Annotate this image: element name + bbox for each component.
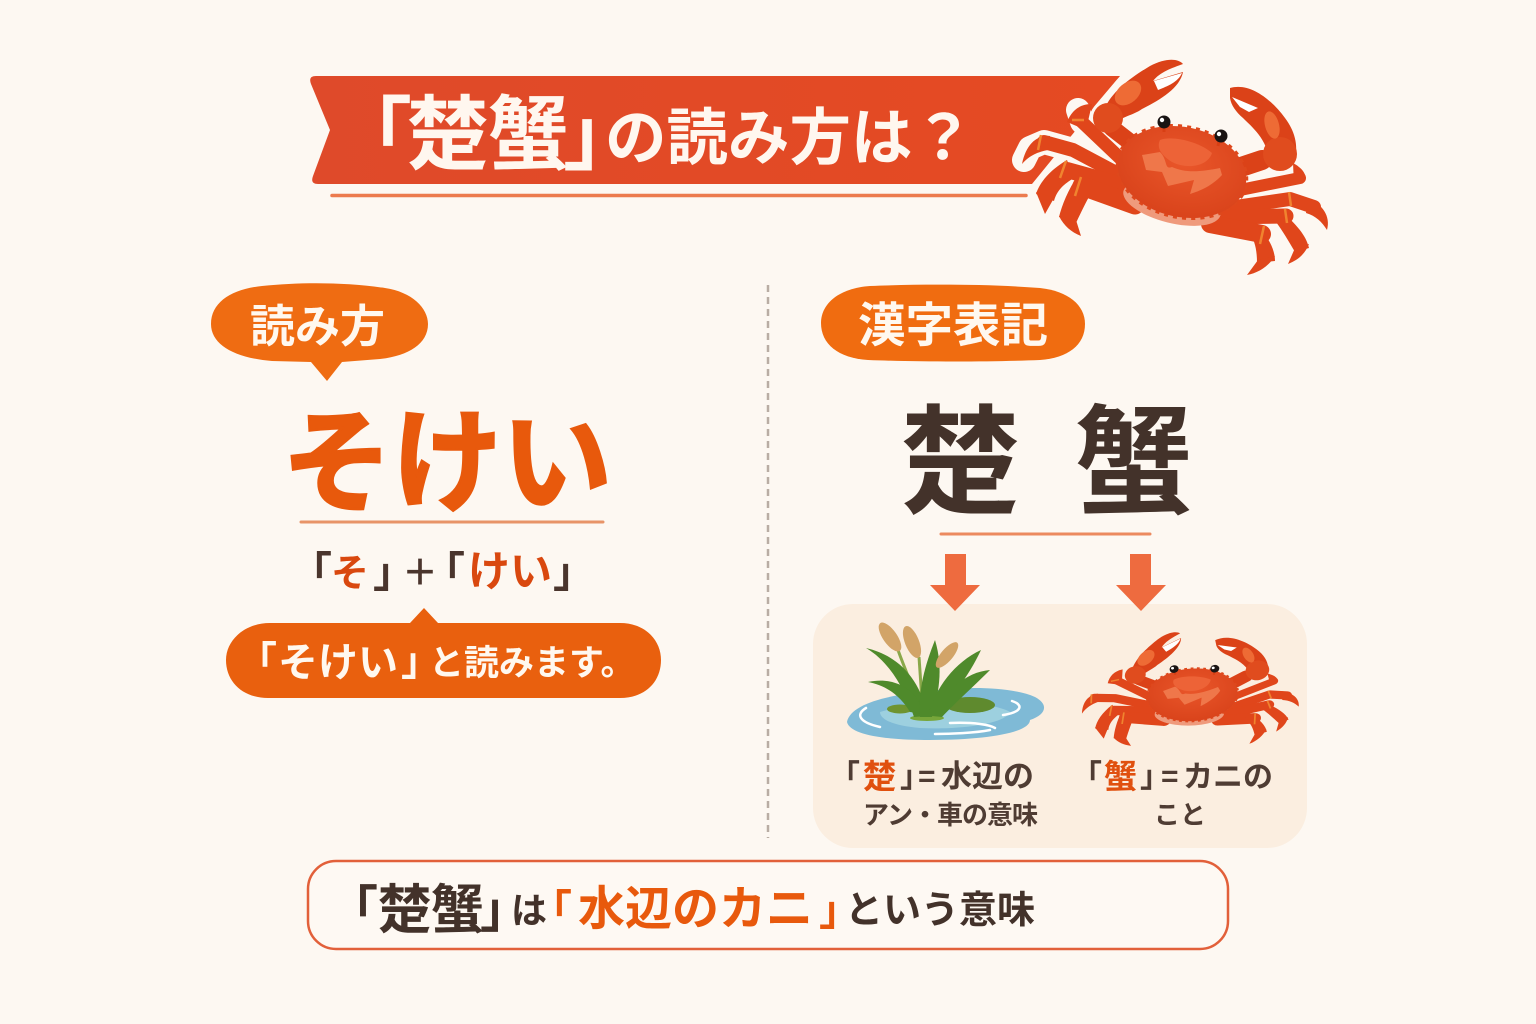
caption: crab: カニの <box>1183 761 1273 794</box>
summary text: 楚蟹 <box>378 881 484 940</box>
summary text: 」 <box>819 887 861 934</box>
breakdown formula: そ <box>331 553 369 595</box>
large kanji: 蟹 <box>1075 398 1193 530</box>
speech bubble: reading label <box>211 283 428 381</box>
arrow: left <box>930 554 980 611</box>
title text: 「 <box>332 91 412 180</box>
icon: small crab <box>1069 610 1305 777</box>
summary text: 「 <box>328 882 378 938</box>
title text: 」 <box>563 91 643 180</box>
callout pill <box>226 608 661 698</box>
icon: reeds in pond <box>847 619 1044 740</box>
breakdown formula: 」 <box>553 549 595 596</box>
breakdown formula: 」 <box>373 549 415 596</box>
breakdown formula: けい <box>468 548 552 595</box>
callout pill: そけい <box>278 641 398 685</box>
callout pill: 」 <box>401 640 441 684</box>
caption: reeds: 」 <box>900 759 931 794</box>
icon: large crab <box>1022 60 1328 275</box>
summary box <box>308 861 1228 949</box>
breakdown formula: ＋ <box>402 552 438 593</box>
caption: reeds: 「 <box>829 759 860 794</box>
large reading そけい: そけい <box>282 401 612 526</box>
panel: kanji <box>813 285 1307 848</box>
label: kanji notation: 漢字表記 <box>858 300 1048 353</box>
meaning panel <box>813 604 1307 848</box>
summary text: 水辺のカニ <box>578 882 813 935</box>
caption: crab: 」 <box>1140 759 1171 794</box>
arrow: right <box>1116 554 1166 611</box>
caption: crab: = <box>1161 760 1179 793</box>
caption: crab <box>1071 758 1273 830</box>
caption: crab: こと <box>1154 800 1206 830</box>
caption: reeds: アン・車の意味 <box>863 800 1038 830</box>
summary text: は <box>511 890 547 931</box>
summary text: 」 <box>480 882 530 938</box>
speech bubble: reading label: 読み方 <box>250 301 385 352</box>
callout pill: 「 <box>237 640 277 684</box>
title text: の読み方は？ <box>605 104 974 173</box>
breakdown formula: 「 <box>290 549 332 596</box>
title text: 楚蟹 <box>407 91 569 181</box>
breakdown formula: 「 <box>423 549 465 596</box>
summary text: 「 <box>530 887 572 934</box>
caption: crab: 「 <box>1071 759 1102 794</box>
title banner <box>310 76 1120 196</box>
panel: reading <box>211 283 661 698</box>
summary text: という意味 <box>845 890 1035 932</box>
label: kanji notation <box>821 285 1085 362</box>
caption: reeds <box>829 758 1038 830</box>
caption: crab: 蟹 <box>1104 758 1137 795</box>
large kanji: 楚 <box>901 398 1019 530</box>
caption: reeds: = <box>918 760 936 793</box>
caption: reeds: 楚 <box>863 758 896 795</box>
callout pill: と読みます。 <box>429 644 636 683</box>
caption: reeds: 水辺の <box>941 759 1034 794</box>
